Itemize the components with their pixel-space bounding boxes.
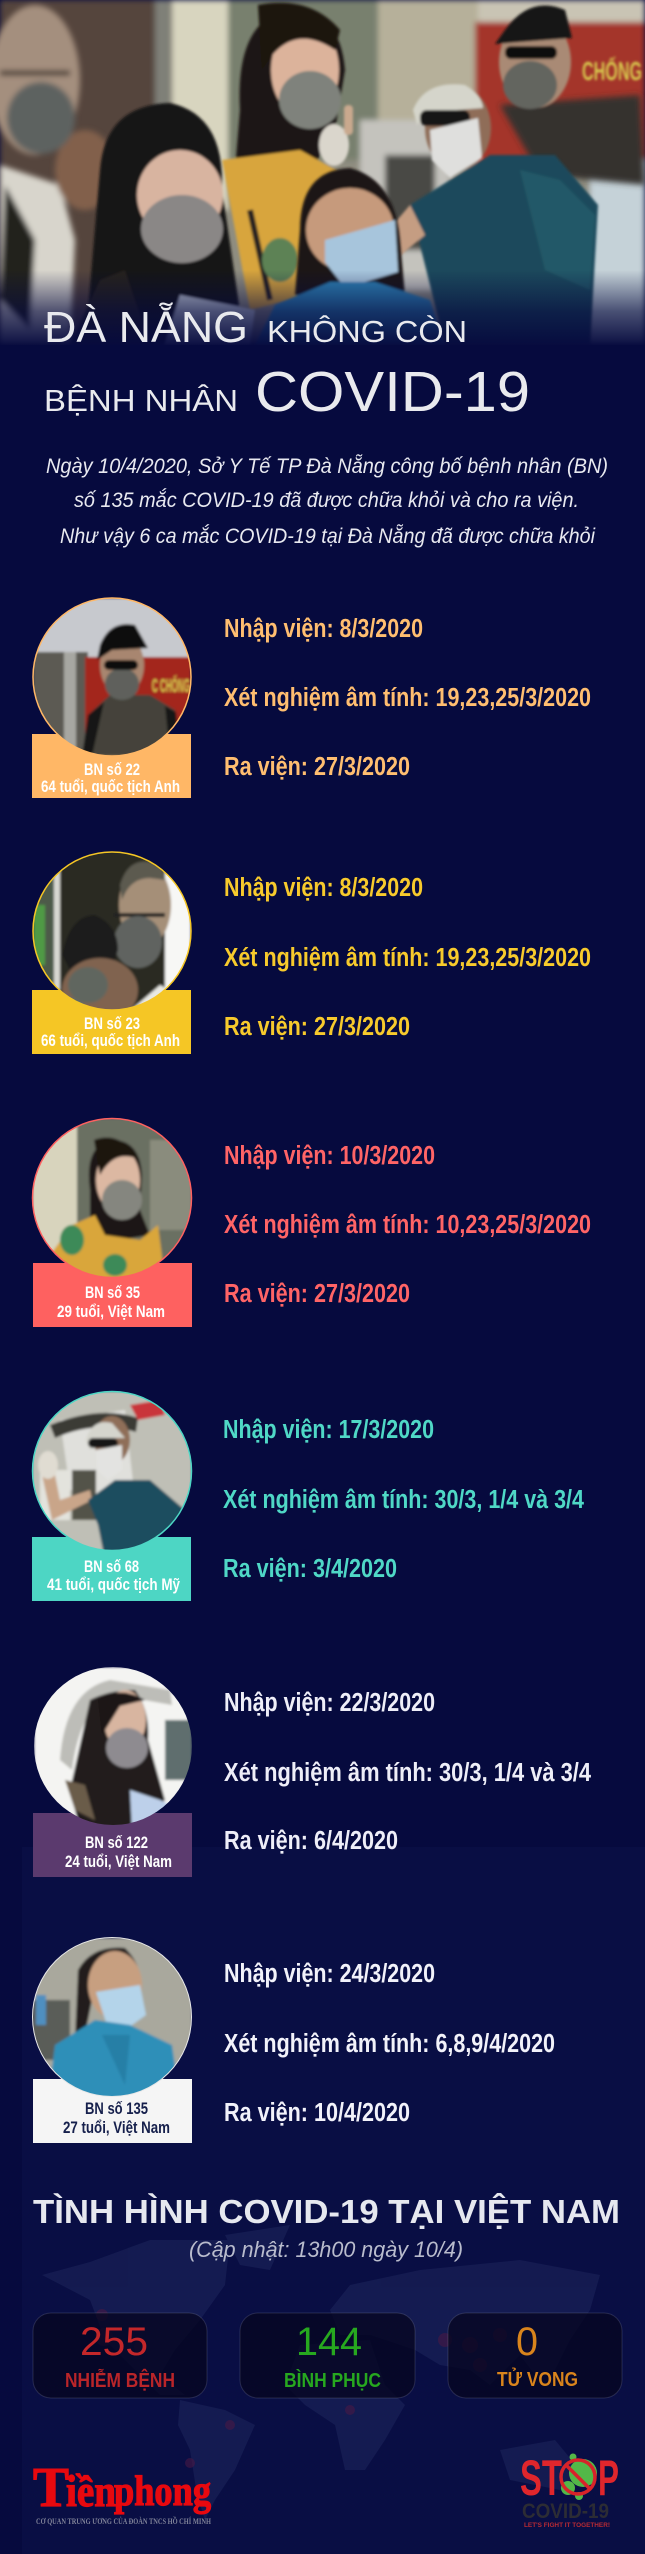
intro text: [46, 455, 608, 548]
header bottom fade: [0, 270, 645, 345]
logo: Tien Phong: [33, 2457, 211, 2519]
logo: Stop COVID-19: [520, 2450, 619, 2529]
stat card: recovered: BÌNH PHỤC: [284, 2369, 381, 2392]
details: patient 135: [224, 1960, 555, 2127]
photo: woman with blue surgical mask: [255, 168, 445, 345]
panel: patient 35: [32, 1118, 591, 1327]
title line 1: ĐÀ NẴNG: [44, 302, 248, 352]
caption box: patient 23: [32, 990, 191, 1054]
details: patient 68: Ra viện: 3/4/2020: [223, 1555, 397, 1583]
map virus markers: [95, 2309, 536, 2468]
logo: Tien Phong: phong: [114, 2469, 211, 2515]
details: patient 68: [223, 1416, 585, 1583]
background lower panel tint: [22, 1847, 645, 2554]
photo ring: patient 35: [32, 1118, 192, 1278]
title line 1: [44, 302, 467, 352]
panel: patient 22: C CHỐNG: [152, 675, 190, 696]
header photo collage: [0, 0, 645, 345]
intro text: Ngày 10/4/2020, Sở Y Tế TP Đà Nẵng công bố bệnh nhân (BN): [46, 455, 608, 478]
photo: patient 135: [32, 1938, 192, 2100]
world map background: [42, 2225, 600, 2520]
caption box: patient 122: [33, 1813, 192, 1877]
logo: Tien Phong: T: [33, 2457, 69, 2519]
caption box: patient 122: BN số 122: [85, 1833, 148, 1852]
photo ring: patient 68: [32, 1392, 192, 1550]
stat card: deaths: 0: [516, 2320, 538, 2364]
stat card: recovered: 144: [296, 2320, 362, 2364]
stat card: infected: [33, 2313, 207, 2398]
stat card: deaths: TỬ VONG: [497, 2367, 578, 2391]
icon: virus with prohibition sign: [561, 2454, 597, 2500]
details: patient 135: Nhập viện: 24/3/2020: [224, 1960, 435, 1988]
photo: man with black cap and banner: [495, 6, 645, 185]
details: patient 23: [224, 874, 591, 1041]
logo: Stop COVID-19: COVID-19: [522, 2500, 609, 2523]
caption box: patient 135: 27 tuổi, Việt Nam: [63, 2118, 170, 2137]
stat card: deaths: [448, 2313, 622, 2398]
caption box: patient 68: 41 tuổi, quốc tịch Mỹ: [47, 1575, 180, 1594]
photo ring: patient 23: [33, 852, 191, 1010]
photo: patient 22: [33, 598, 191, 756]
photo: patient 122: [34, 1667, 192, 1830]
details: patient 122: Xét nghiệm âm tính: 30/3, 1/4 và 3/4: [224, 1759, 592, 1787]
photo ring: patient 135: [32, 1938, 192, 2096]
details: patient 23: Nhập viện: 8/3/2020: [224, 874, 423, 902]
update note: (Cập nhật: 13h00 ngày 10/4): [189, 2237, 463, 2262]
photo: left man with mask: [0, 5, 115, 345]
title line 2: COVID-19: [255, 360, 530, 424]
details: patient 135: Xét nghiệm âm tính: 6,8,9/4/2020: [224, 2030, 555, 2058]
photo: patient 35: [32, 1118, 192, 1285]
caption box: patient 23: BN số 23: [84, 1014, 140, 1033]
photo: patient 68: [32, 1391, 192, 1560]
caption box: patient 35: [33, 1263, 192, 1327]
details: patient 23: Ra viện: 27/3/2020: [224, 1013, 410, 1041]
caption box: patient 23: 66 tuổi, quốc tịch Anh: [41, 1031, 180, 1050]
details: patient 122: Ra viện: 6/4/2020: [224, 1827, 398, 1855]
logo: Tien Phong: iền: [66, 2467, 116, 2516]
logo: Stop COVID-19: ST: [520, 2450, 562, 2506]
panel: patient 135: [32, 1938, 555, 2143]
intro text: số 135 mắc COVID-19 đã được chữa khỏi và cho ra viện.: [74, 489, 579, 512]
details: patient 22: Ra viện: 27/3/2020: [224, 753, 410, 781]
details: patient 35: Nhập viện: 10/3/2020: [224, 1142, 435, 1170]
caption box: patient 122: 24 tuổi, Việt Nam: [65, 1852, 172, 1871]
caption box: patient 135: BN số 135: [85, 2099, 148, 2118]
stat card: infected: NHIỄM BỆNH: [65, 2368, 175, 2392]
details: patient 68: Xét nghiệm âm tính: 30/3, 1/4 và 3/4: [223, 1486, 585, 1514]
caption box: patient 68: [32, 1537, 191, 1601]
details: patient 35: Ra viện: 27/3/2020: [224, 1280, 410, 1308]
details: patient 122: [224, 1689, 592, 1855]
details: patient 68: Nhập viện: 17/3/2020: [223, 1416, 434, 1444]
heading: situation in Vietnam: TÌNH HÌNH COVID-19 TẠI VIỆT NAM: [33, 2193, 620, 2230]
panel: patient 122: [33, 1667, 592, 1877]
caption box: patient 22: [32, 734, 191, 798]
intro text: Như vậy 6 ca mắc COVID-19 tại Đà Nẵng đã được chữa khỏi: [60, 525, 596, 548]
details: patient 35: [224, 1142, 591, 1308]
photo: woman with long hair in front: [70, 103, 255, 345]
panel: patient 68: [32, 1391, 585, 1601]
caption box: patient 68: BN số 68: [84, 1557, 139, 1576]
caption box: patient 22: BN số 22: [84, 760, 140, 779]
photo: patient 23: [33, 852, 191, 1022]
caption box: patient 22: 64 tuổi, quốc tịch Anh: [41, 777, 180, 796]
panel: patient 22: [32, 598, 591, 798]
panel: patient 23: [32, 852, 591, 1054]
details: patient 135: Ra viện: 10/4/2020: [224, 2099, 410, 2127]
logo: Stop COVID-19: LET'S FIGHT IT TOGETHER!: [524, 2522, 610, 2529]
photo backdrop: [0, 0, 645, 345]
title line 1: KHÔNG CÒN: [267, 314, 467, 349]
title line 2: BỆNH NHÂN: [44, 383, 238, 418]
caption box: patient 135: [33, 2079, 192, 2143]
stat card: infected: 255: [80, 2320, 148, 2364]
stat card: recovered: [240, 2313, 415, 2398]
photo ring: patient 22: [33, 598, 191, 756]
title line 2: [44, 360, 530, 424]
photo: right man in teal shirt: [380, 84, 598, 345]
details: patient 22: [224, 615, 591, 781]
caption box: patient 35: 29 tuổi, Việt Nam: [57, 1302, 165, 1321]
details: patient 122: Nhập viện: 22/3/2020: [224, 1689, 435, 1717]
logo: Stop COVID-19: P: [598, 2450, 619, 2506]
title: [44, 302, 530, 424]
photo: woman in yellow dress: [222, 3, 353, 310]
logo tagline: CƠ QUAN TRUNG ƯƠNG CỦA ĐOÀN TNCS HỒ CHÍ MINH: [36, 2516, 211, 2526]
caption box: patient 35: BN số 35: [85, 1283, 140, 1302]
details: patient 22: Nhập viện: 8/3/2020: [224, 615, 423, 643]
